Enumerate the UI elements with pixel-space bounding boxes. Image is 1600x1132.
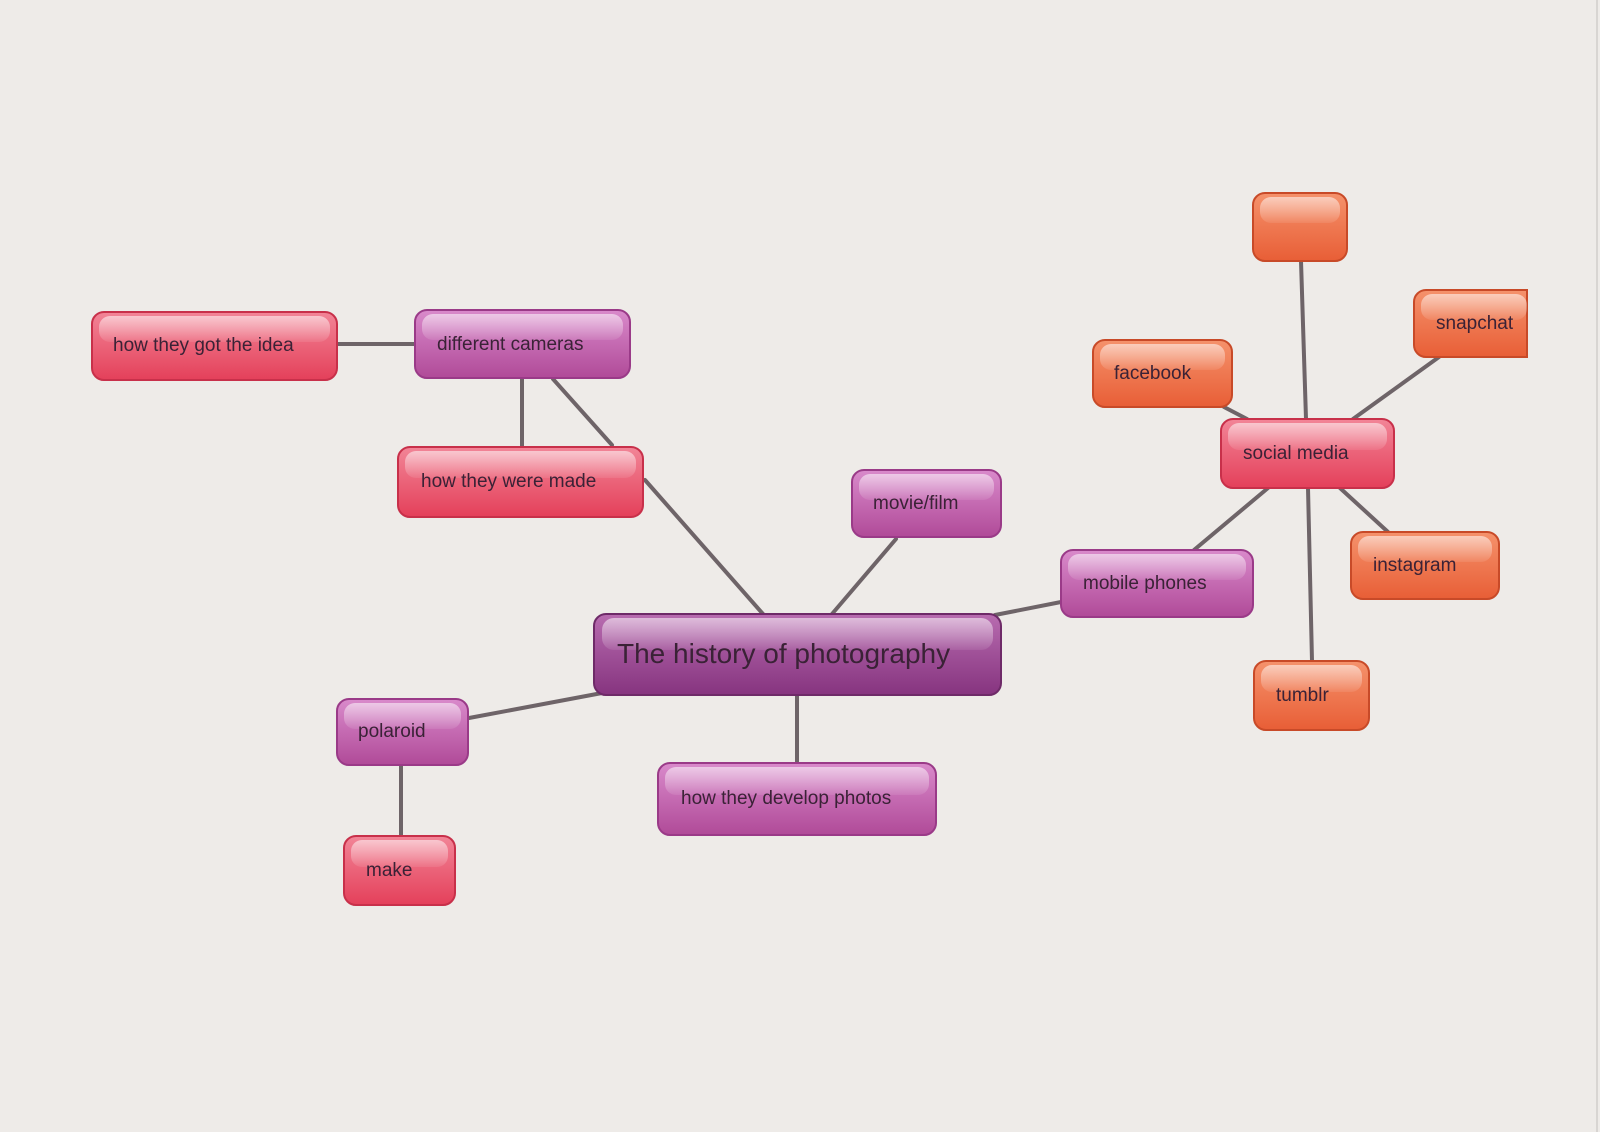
node: mobile phones (1061, 550, 1253, 617)
node: polaroid: polaroid (358, 721, 426, 742)
node: movie/film (852, 470, 1001, 537)
node: snapchat: snapchat (1436, 313, 1514, 334)
node: social media (1221, 419, 1394, 488)
node: mobile phones: mobile phones (1083, 573, 1207, 594)
node: movie/film: movie/film (873, 493, 959, 514)
connector lines (337, 261, 1439, 836)
node: how they develop photos (658, 763, 936, 835)
node: polaroid (337, 699, 468, 765)
central node: The history of photography (594, 614, 1001, 695)
node: how they got the idea (92, 312, 337, 380)
node: instagram (1351, 532, 1499, 599)
node: different cameras (415, 310, 630, 378)
node: how they were made (398, 447, 643, 517)
node: different cameras: different cameras (437, 334, 583, 355)
node: facebook (1093, 340, 1232, 407)
central node: The history of photography: The history of photography (617, 638, 950, 669)
node: tumblr: tumblr (1276, 685, 1329, 706)
node: make: make (366, 860, 412, 881)
node: snapchat (1414, 290, 1527, 357)
node: blank (1253, 193, 1347, 261)
node: instagram: instagram (1373, 555, 1456, 576)
node: facebook: facebook (1114, 363, 1192, 384)
node: social media: social media (1243, 443, 1349, 464)
node: how they were made: how they were made (421, 471, 596, 492)
node: make (344, 836, 455, 905)
node: how they got the idea: how they got the idea (113, 335, 294, 356)
node: how they develop photos: how they develop photos (681, 788, 891, 809)
node: tumblr (1254, 661, 1369, 730)
